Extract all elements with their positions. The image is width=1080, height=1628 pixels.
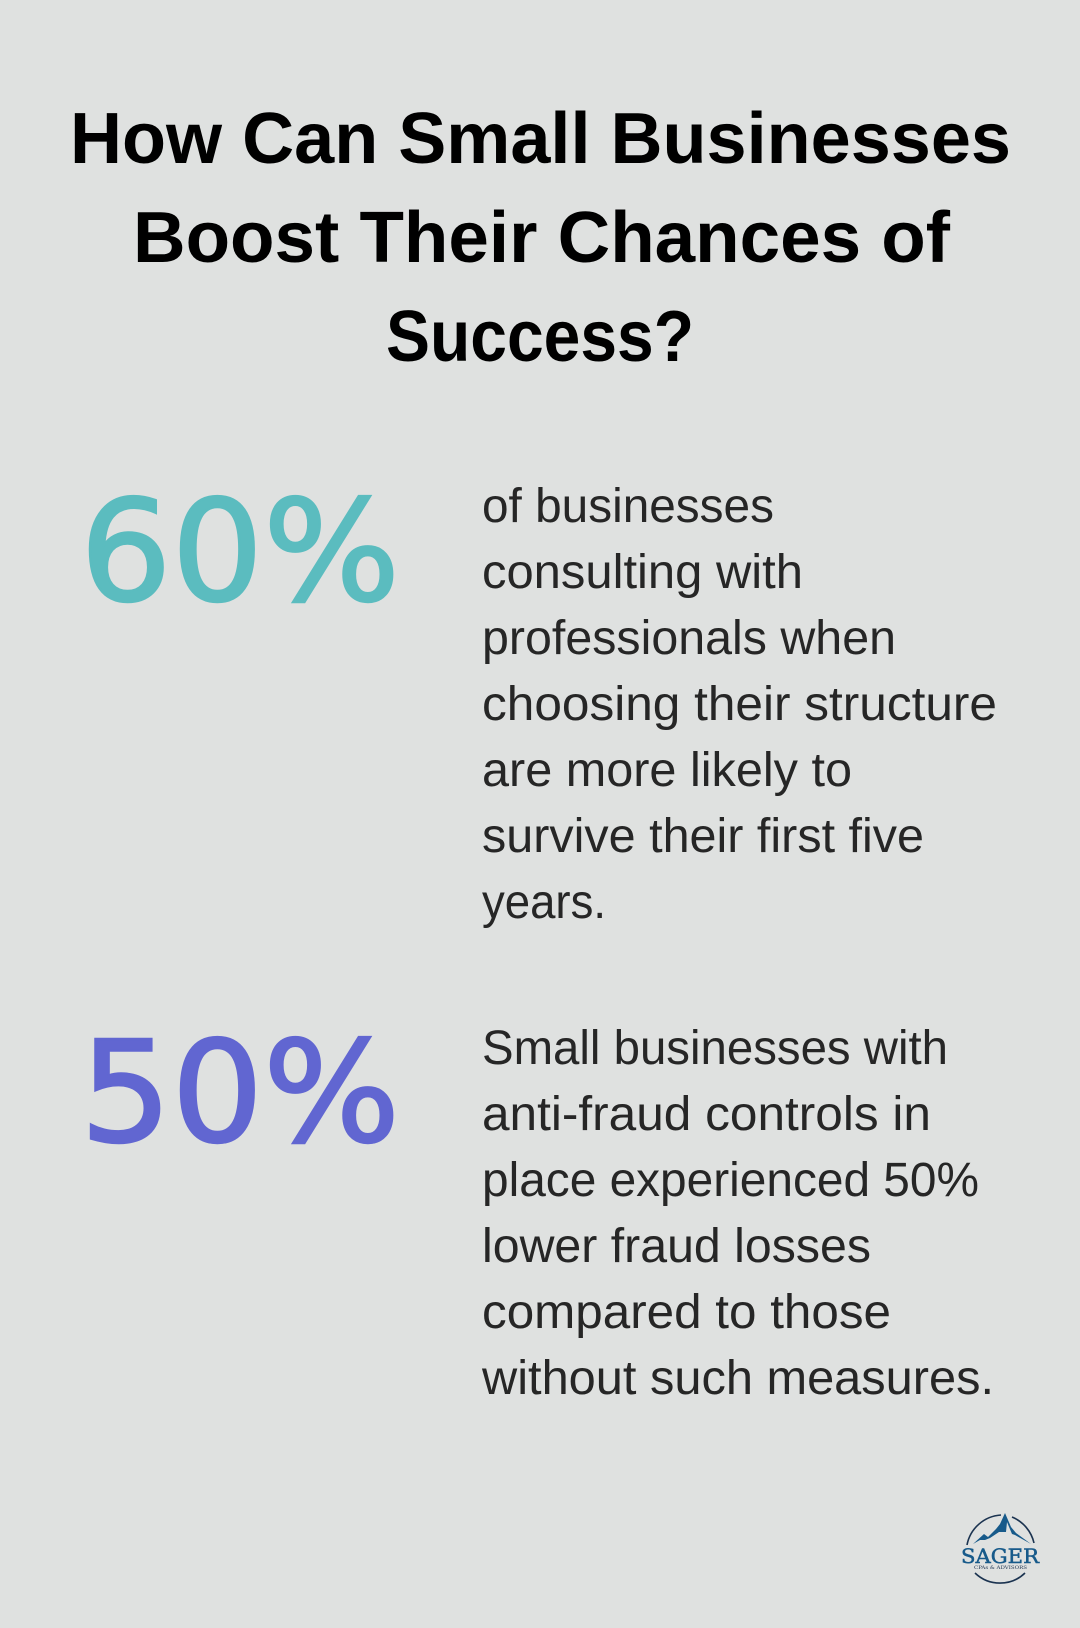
- title: How Can Small Businesses: [70, 99, 1011, 179]
- title: Success?: [386, 297, 694, 377]
- text block: 60% description: of businesses: [482, 480, 774, 533]
- text block: 50% description: without such measures.: [481, 1352, 994, 1405]
- text block: 50% description: place experienced 50%: [482, 1154, 979, 1207]
- text block: 60% description: choosing their structure: [482, 678, 997, 731]
- stat: 50%: 50%: [80, 1012, 400, 1175]
- text block: 60% description: [482, 480, 997, 929]
- logo: Sager CPAs & Advisors: SAGER: [961, 1544, 1040, 1568]
- text block: 50% description: anti-fraud controls in: [482, 1088, 931, 1141]
- title: Boost Their Chances of: [133, 198, 951, 278]
- text block: 60% description: professionals when: [482, 612, 896, 665]
- text block: 60% description: consulting with: [482, 546, 803, 599]
- text block: 60% description: years.: [482, 876, 606, 929]
- text block: 60% description: survive their first five: [482, 810, 924, 863]
- text block: 50% description: [481, 1022, 994, 1405]
- text block: 50% description: compared to those: [482, 1286, 891, 1339]
- text block: 60% description: are more likely to: [482, 744, 852, 797]
- logo: Sager CPAs & Advisors: CPAs & ADVISORS: [974, 1565, 1027, 1571]
- text block: 50% description: Small businesses with: [482, 1022, 948, 1075]
- text block: 50% description: lower fraud losses: [482, 1220, 871, 1273]
- stat: 60%: 60%: [80, 471, 400, 634]
- logo: Sager CPAs & Advisors: [961, 1513, 1040, 1583]
- title: [70, 99, 1011, 377]
